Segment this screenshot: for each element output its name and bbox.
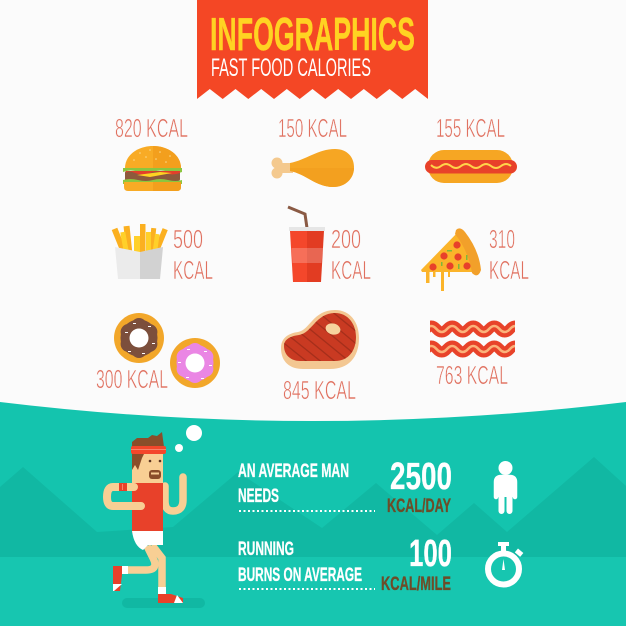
icon: hot dog <box>425 150 517 183</box>
stat: 2500 kcal per day: 2500 <box>390 456 452 498</box>
icon: bacon <box>426 326 520 352</box>
label: 310 kcal: KCAL <box>489 255 529 285</box>
heading: INFOGRAPHICS <box>210 8 415 60</box>
label: 200 kcal: KCAL <box>331 255 371 285</box>
stat: running text: RUNNING <box>238 539 294 560</box>
title banner <box>197 0 428 99</box>
label: 500 kcal: KCAL <box>173 255 213 285</box>
icon: person <box>496 461 515 511</box>
icon: pink donut <box>170 338 220 388</box>
stat: 2500 kcal per day <box>387 456 452 517</box>
icon: steak <box>280 310 362 369</box>
stat: 100 kcal per mile: KCAL/MILE <box>381 574 451 595</box>
label: 300 kcal: 300 KCAL <box>96 364 168 394</box>
icon: stopwatch <box>488 542 523 584</box>
label: 200 kcal: 200 <box>331 224 361 254</box>
stat: 100 kcal per mile: 100 <box>409 533 452 575</box>
label: 200 kcal <box>331 224 371 285</box>
icon: soda cup <box>288 207 325 282</box>
icon: fries <box>112 224 168 279</box>
label: 845 kcal: 845 KCAL <box>283 375 356 405</box>
label: 310 kcal: 310 <box>489 224 515 254</box>
icon: pizza slice <box>421 228 481 291</box>
stat: running text: BURNS ON AVERAGE <box>238 565 362 586</box>
teal lower panel <box>0 402 626 626</box>
stat: 100 kcal per mile <box>381 533 452 595</box>
label: 155 kcal: 155 KCAL <box>436 113 505 143</box>
stat: average man text: NEEDS <box>238 486 279 507</box>
label: 820 kcal: 820 KCAL <box>115 113 188 143</box>
stat: running text <box>238 539 362 586</box>
stat: average man text <box>238 461 349 507</box>
stat: 2500 kcal per day: KCAL/DAY <box>387 496 451 517</box>
label: 150 kcal: 150 KCAL <box>278 113 347 143</box>
label: 500 kcal <box>173 224 213 285</box>
icon: burger <box>123 146 182 191</box>
runner character <box>107 425 205 608</box>
label: 500 kcal: 500 <box>173 224 203 254</box>
icon: chocolate donut <box>114 313 164 363</box>
label: 763 kcal: 763 KCAL <box>436 360 508 390</box>
label: 310 kcal <box>489 224 529 285</box>
icon: chicken leg <box>272 149 354 187</box>
stat: average man text: AN AVERAGE MAN <box>238 461 349 482</box>
subheading: FAST FOOD CALORIES <box>211 54 371 82</box>
thought bubbles <box>175 425 202 452</box>
